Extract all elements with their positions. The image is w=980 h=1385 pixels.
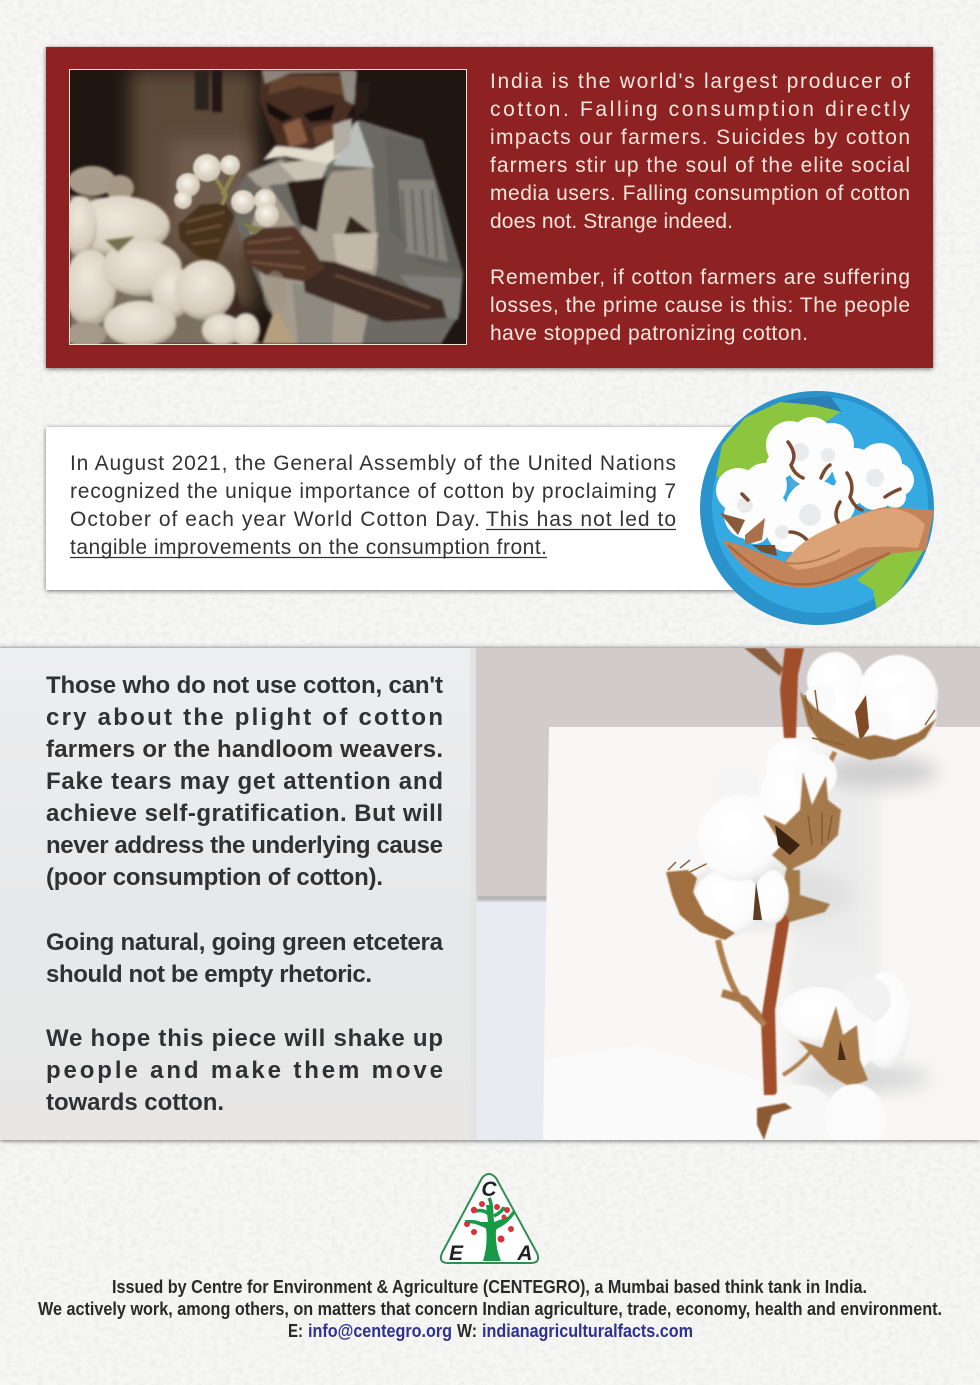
text: World Cotton Day note: tangible improvements on the consumption front.: [70, 536, 547, 559]
text: India is the world's largest producer: [490, 70, 910, 233]
logo: CENTEGRO triangle: C: [481, 1178, 497, 1201]
text: we hope: [46, 1025, 443, 1116]
text: India is the world's largest producer: cotton. Falling consumption directly: [490, 98, 910, 121]
panel: World Cotton Day: [46, 427, 746, 590]
footer: issuer details: Issued by Centre for Environment & Agriculture (CENTEGRO), a Mumbai based think tank in India.: [112, 1277, 867, 1297]
text: India is the world's largest producer: media users. Falling consumption of cotton: [490, 182, 910, 205]
grey fabric: [476, 896, 546, 902]
text: going natural: [46, 929, 444, 988]
logo: CENTEGRO triangle: E: [449, 1242, 464, 1265]
stem: [718, 648, 835, 1095]
boll 5: [756, 1083, 880, 1140]
footer: issuer details: indianagriculturalfacts.com: [482, 1321, 693, 1341]
icon: globe with hand holding cotton: [700, 391, 934, 625]
text: going natural: should not be empty rhetoric.: [46, 961, 372, 988]
moustache and beard: [280, 160, 328, 181]
text: Remember, if cotton farmers are suffering: losses, the prime cause is this: The people: [490, 294, 910, 317]
text: fake tears: never address the underlying cause: [46, 832, 443, 859]
cotton bolls: [716, 417, 914, 558]
text: fake tears: (poor consumption of cotton).: [46, 864, 383, 891]
collar: [247, 160, 302, 186]
chest: [287, 176, 326, 232]
head: [259, 70, 357, 166]
text: India is the world's largest producer: impacts our farmers. Suicides by cotton: [490, 126, 910, 149]
text: Remember, if cotton farmers are suffering: Remember, if cotton farmers are suffering: [490, 266, 910, 289]
footer: issuer details: E:: [288, 1321, 303, 1341]
boll 3: [665, 860, 790, 941]
text: India is the world's largest producer: does not. Strange indeed.: [490, 210, 733, 233]
footer: issuer details: W:: [457, 1321, 477, 1341]
text: World Cotton Day note: In August 2021, the General Assembly of the United Nations: [70, 452, 676, 475]
text: fake tears: [46, 672, 443, 891]
footer: issuer details: [38, 1277, 942, 1341]
text: going natural: Going natural, going green etcetera: [46, 929, 444, 956]
text: we hope: towards cotton.: [46, 1089, 224, 1116]
text: fake tears: Those who do not use cotton, can't: [46, 672, 443, 699]
text: we hope: We hope this piece will shake up: [46, 1025, 443, 1052]
boll 4: [784, 973, 906, 1086]
footer: issuer details: info@centegro.org: [308, 1321, 452, 1341]
text: India is the world's largest producer: India is the world's largest producer of: [490, 70, 910, 93]
shirt: [232, 120, 463, 344]
logo: CENTEGRO triangle: A: [516, 1242, 533, 1265]
text: World Cotton Day note: [70, 452, 676, 559]
text: World Cotton Day note: recognized the unique importance of cotton by proclaiming 7: [70, 480, 676, 503]
text: we hope: people and make them move: [46, 1057, 443, 1084]
text: fake tears: cry about the plight of cotton: [46, 704, 443, 731]
logo: CENTEGRO triangle: [441, 1174, 538, 1265]
text: fake tears: Fake tears may get attention and: [46, 768, 443, 795]
boll 1: [800, 652, 938, 760]
text: fake tears: farmers or the handloom weavers.: [46, 736, 443, 763]
text: Remember, if cotton farmers are suffering: [490, 266, 910, 345]
blurred foreground cotton: [63, 166, 262, 348]
hand: [723, 507, 934, 587]
hands: [243, 226, 325, 282]
text: India is the world's largest producer: farmers stir up the soul of the elite social: [490, 154, 910, 177]
cotton in hands: [174, 154, 279, 235]
text: fake tears: achieve self-gratification. But will: [46, 800, 443, 827]
panel: farmer and cotton consumption: [46, 47, 933, 368]
forearm: [300, 258, 447, 322]
text: World Cotton Day note: October of each year World Cotton Day.: [70, 508, 480, 531]
white cloth: [543, 727, 980, 1140]
boll 2: [698, 739, 841, 881]
photo: farmer holding cotton: [63, 69, 467, 348]
photo: cotton branch on white cloth: [470, 647, 980, 1152]
text: Remember, if cotton farmers are suffering: have stopped patronizing cotton.: [490, 322, 808, 345]
panel: those who do not use cotton: [0, 647, 980, 1152]
text: World Cotton Day note: This has not led to: [486, 508, 676, 531]
